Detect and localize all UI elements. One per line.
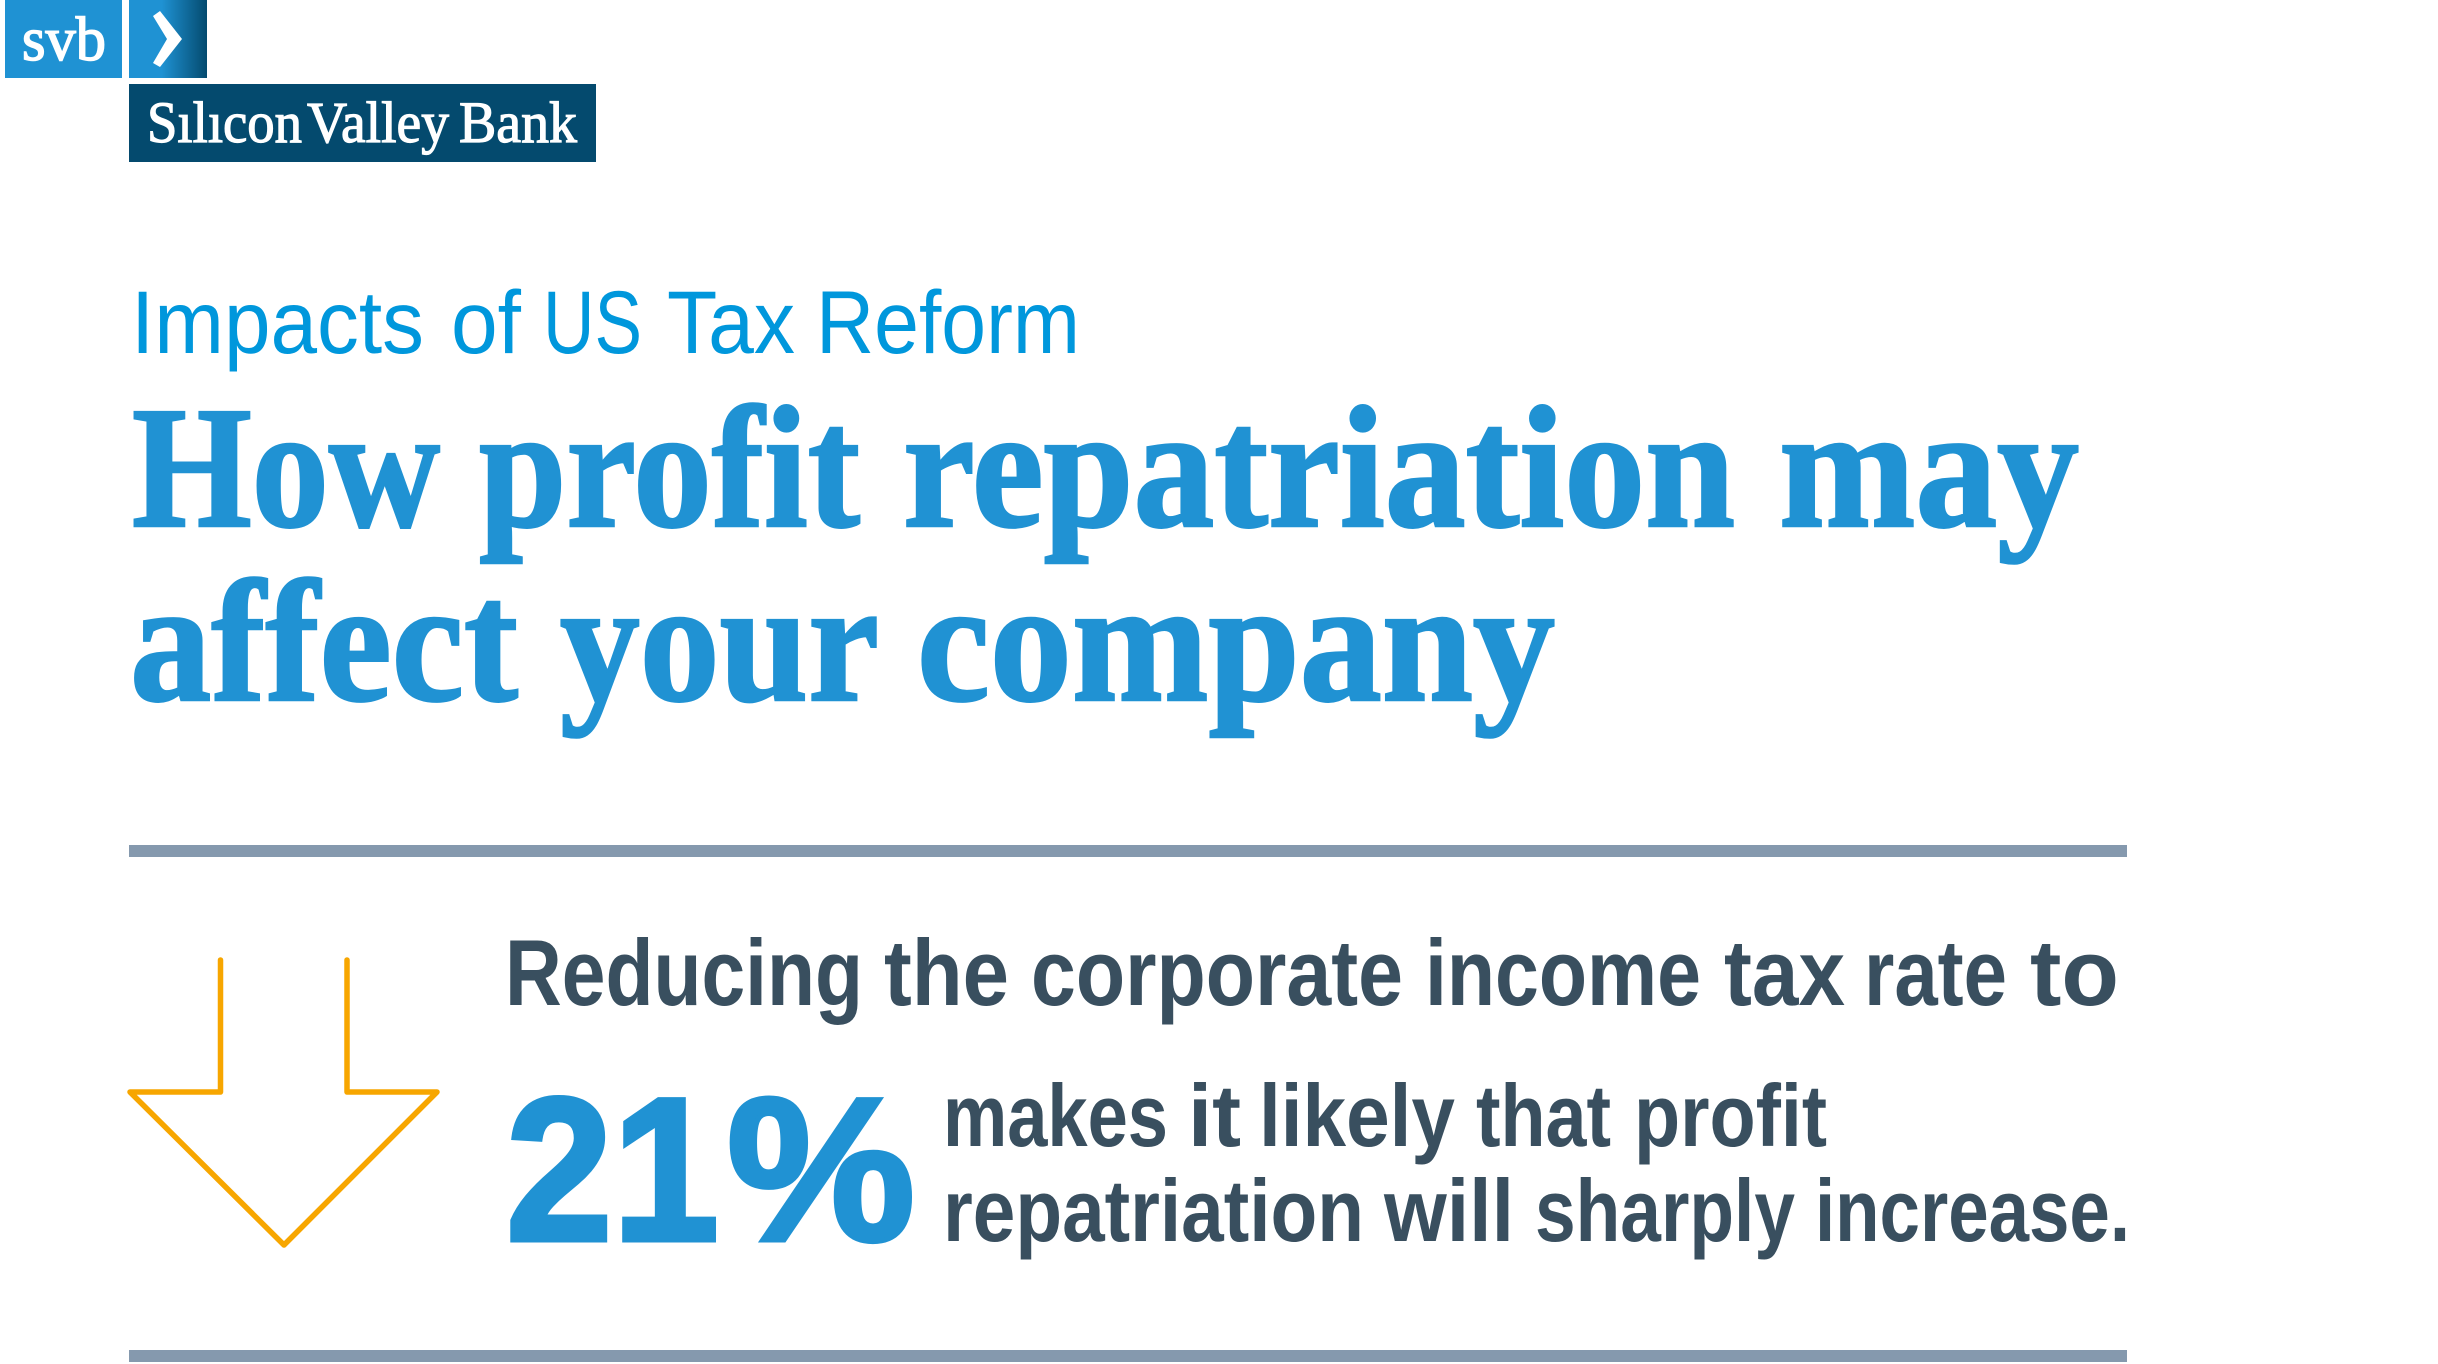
logo tile: svb: svb	[22, 6, 106, 74]
lead-in text: the	[884, 920, 1009, 1025]
statistic description: makes	[943, 1066, 1168, 1165]
lead-in text: corporate	[1031, 920, 1403, 1025]
icon: down arrow	[130, 960, 437, 1245]
logo wordmark: Sılıcon	[147, 90, 302, 155]
statistic description	[943, 1066, 2130, 1260]
title: company	[917, 545, 1555, 738]
statistic description: repatriation	[943, 1161, 1364, 1260]
lead-in text	[505, 920, 2119, 1025]
statistic description: increase.	[1815, 1161, 2130, 1260]
subtitle: Reform	[816, 272, 1080, 372]
title: profit	[479, 371, 860, 564]
title	[130, 371, 2079, 738]
lead-in text: income	[1425, 920, 1701, 1025]
statistic description: that	[1476, 1066, 1611, 1165]
logo: Silicon Valley Bank	[5, 0, 596, 162]
subtitle: Tax	[667, 272, 795, 372]
lead-in text: to	[2030, 920, 2119, 1025]
title: affect	[130, 545, 518, 738]
statistic: 21%: %	[727, 1056, 915, 1284]
title: may	[1779, 371, 2079, 564]
subtitle: Impacts	[131, 272, 424, 372]
logo tile: chevron	[129, 0, 207, 78]
subtitle: US	[543, 272, 642, 372]
title: your	[560, 545, 879, 738]
lead-in text: tax	[1724, 920, 1845, 1025]
logo wordmark	[129, 84, 596, 162]
title: repatriation	[903, 371, 1735, 564]
statistic: 21%: 21	[506, 1056, 719, 1284]
subtitle: of	[451, 272, 521, 372]
logo wordmark: Bank	[459, 90, 577, 155]
statistic description: it	[1188, 1066, 1241, 1165]
statistic description: sharply	[1535, 1161, 1795, 1260]
logo tile: svb	[5, 0, 122, 78]
logo wordmark: Valley	[307, 90, 449, 155]
statistic: 21%	[506, 1056, 915, 1284]
statistic description: will	[1383, 1161, 1514, 1260]
lead-in text: Reducing	[505, 920, 863, 1025]
subtitle	[131, 272, 1080, 372]
statistic description: profit	[1634, 1066, 1827, 1165]
lead-in text: rate	[1864, 920, 2007, 1025]
statistic description: likely	[1259, 1066, 1455, 1165]
title: How	[132, 371, 440, 564]
